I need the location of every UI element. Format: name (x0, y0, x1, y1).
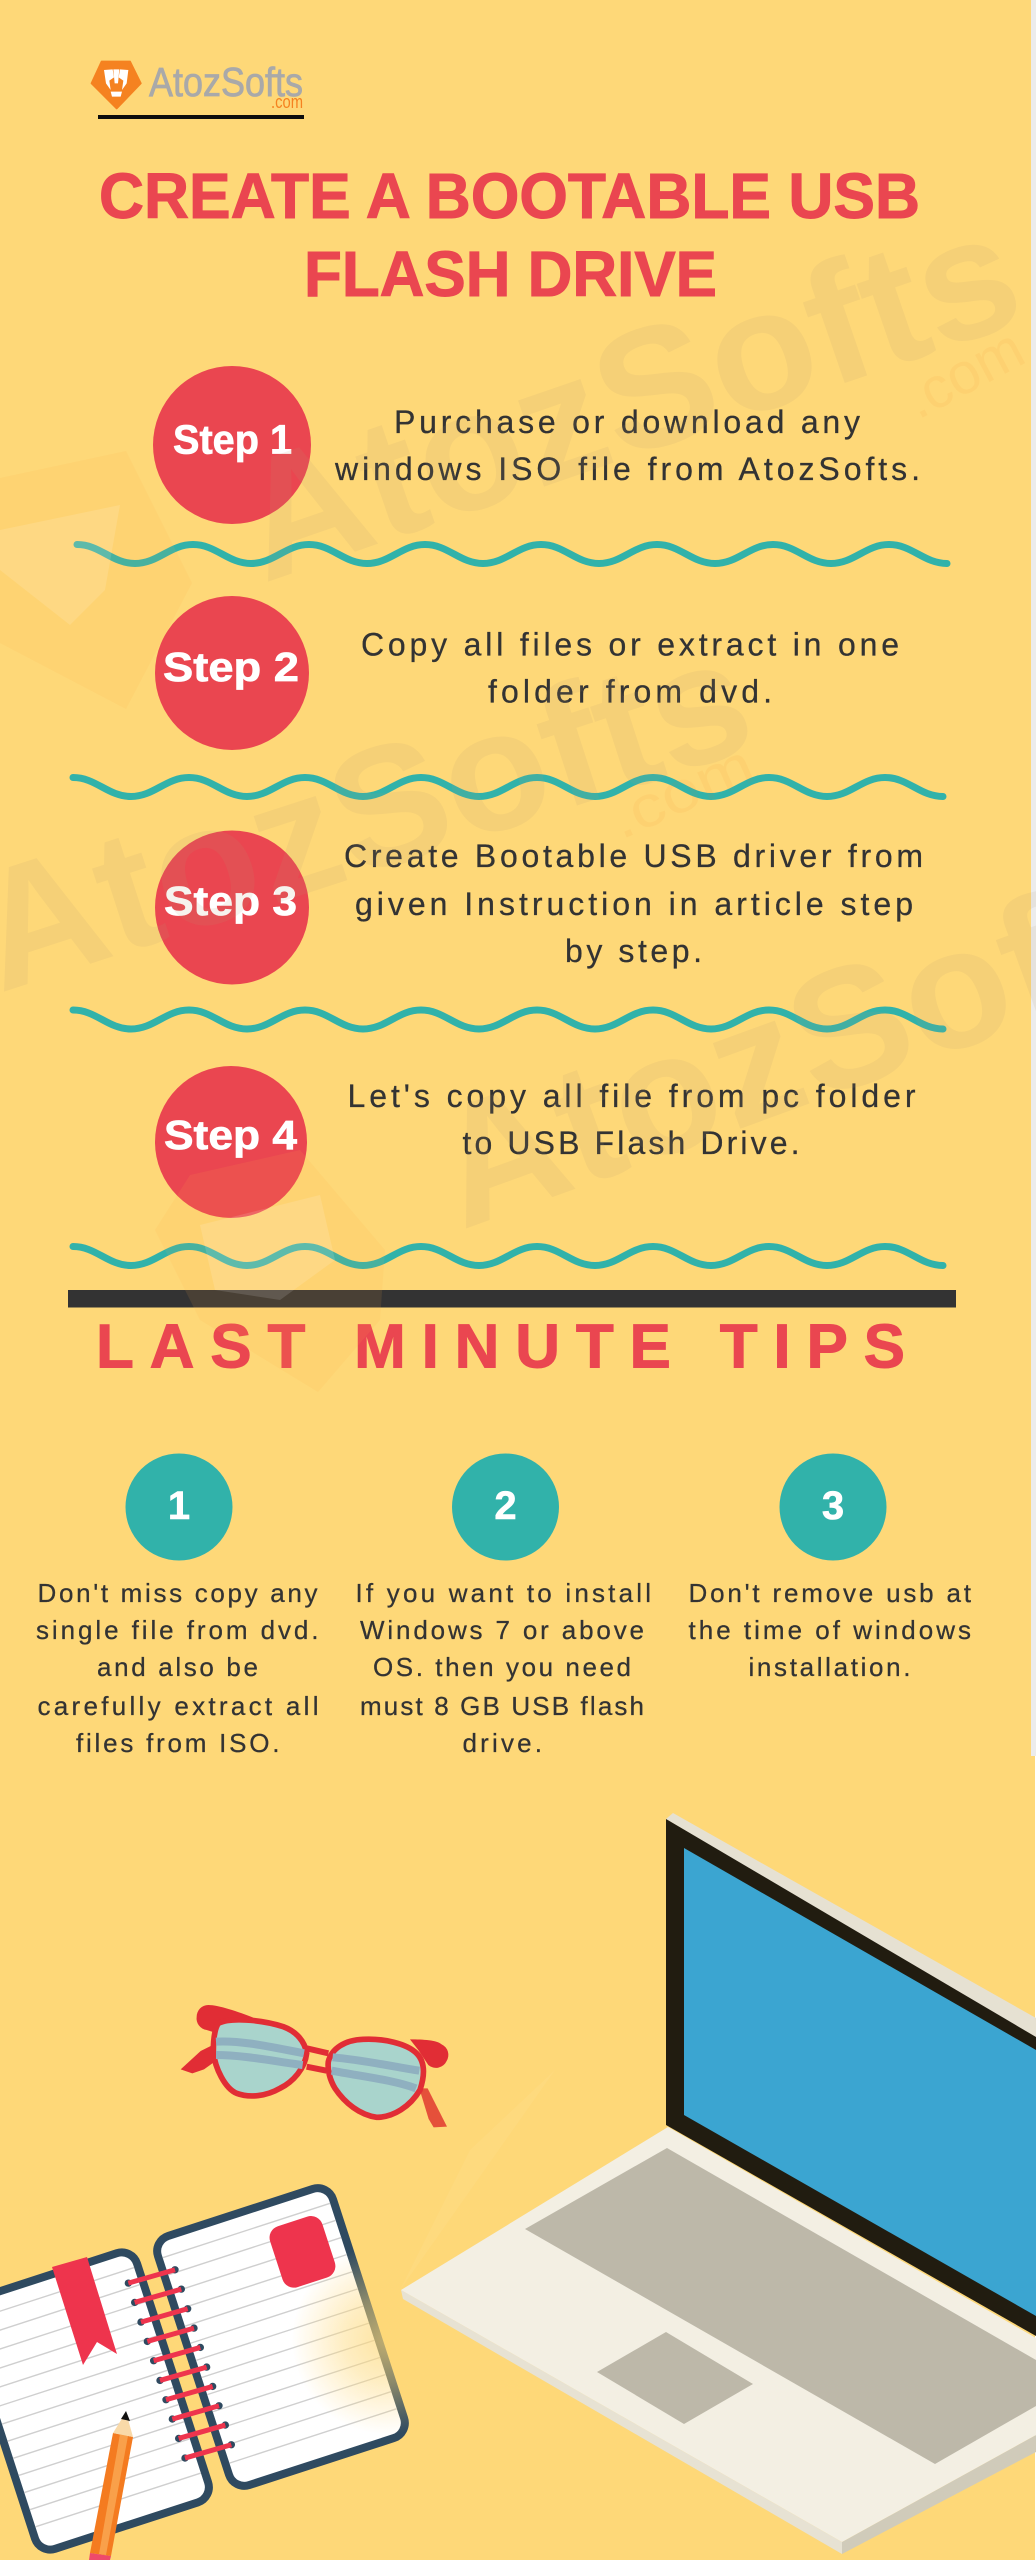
step 2 text (361, 626, 899, 710)
laptop base (401, 2127, 1036, 2554)
tip 1 text (36, 1578, 318, 1758)
watermark: faint AtozSofts logos: .com (894, 315, 1034, 431)
icon: lion shield (92, 62, 141, 108)
tip 1 text: single file from dvd. (36, 1615, 318, 1645)
tip 3 number: 3 (822, 1484, 844, 1528)
logo wordmark: AtozSofts (149, 59, 303, 105)
tip 3 (688, 1454, 972, 1682)
tip 3 text: Don't remove usb at (688, 1578, 972, 1608)
step 3 (155, 830, 923, 984)
tip 1 text: and also be (97, 1652, 258, 1682)
heading: last minute tips: LAST MINUTE TIPS (96, 1312, 905, 1382)
tip 2 text (356, 1578, 651, 1758)
tip 2 text: If you want to install (356, 1578, 651, 1608)
tip 2 (356, 1454, 651, 1758)
notebook left page (0, 2248, 213, 2554)
logo domain: .com (271, 92, 303, 112)
step 3 badge (155, 830, 309, 984)
bookmark (52, 2257, 117, 2365)
illustration: laptop (400, 1813, 1036, 2554)
step 3 text: by step. (565, 933, 702, 969)
laptop lid (666, 1813, 1036, 2336)
step 2 text: Copy all files or extract in one (361, 626, 899, 662)
step 1 badge (153, 366, 311, 524)
tip 2 text: drive. (462, 1728, 542, 1758)
tip 1 text: carefully extract all (38, 1691, 318, 1721)
tip 3 text: installation. (748, 1652, 910, 1682)
tip 1 text: files from ISO. (76, 1728, 280, 1758)
watermark: faint AtozSofts logos: AtozSofts (214, 175, 1036, 618)
step 1 text: windows ISO file from AtozSofts. (334, 451, 920, 487)
step 4 text (348, 1078, 916, 1161)
tip 1 number (126, 1454, 232, 1560)
step 2 text: folder from dvd. (488, 674, 772, 710)
watermark: faint AtozSofts logos: .com (600, 731, 763, 852)
pencil (89, 2411, 133, 2560)
step 3 text (344, 838, 923, 969)
tip 3 number (780, 1454, 886, 1560)
tip 2 text: OS. then you need (373, 1652, 631, 1682)
tip 2 text: must 8 GB USB flash (360, 1691, 644, 1721)
tip 3 text: the time of windows (688, 1615, 971, 1645)
step 1 (153, 366, 920, 524)
illustration: glasses (181, 2005, 448, 2127)
step 4 (155, 1066, 916, 1218)
tip 2 number: 2 (494, 1484, 517, 1528)
sticky note (266, 2213, 339, 2291)
tip 2 text: Windows 7 or above (360, 1615, 644, 1645)
step 1 badge: Step 1 (173, 416, 292, 462)
logo (92, 59, 304, 119)
illustration: notebook (0, 2182, 415, 2560)
spiral binding (128, 2270, 231, 2458)
step 1 text: Purchase or download any (394, 404, 860, 440)
step 4 text: Let's copy all file from pc folder (348, 1078, 916, 1114)
step 2 badge (155, 596, 309, 750)
step 3 text: Create Bootable USB driver from (344, 838, 923, 874)
step 2 (155, 596, 899, 750)
tip 3 text (688, 1578, 972, 1682)
step 4 badge: Step 4 (164, 1112, 297, 1158)
step 1 text (334, 404, 920, 487)
tip 2 number (452, 1454, 559, 1560)
tip 1 number: 1 (168, 1484, 190, 1528)
step 3 text: given Instruction in article step (355, 886, 913, 922)
step 4 text: to USB Flash Drive. (462, 1125, 800, 1161)
notebook right page (153, 2182, 415, 2494)
laptop keyboard (525, 2148, 1036, 2464)
step 4 badge (155, 1066, 307, 1218)
tip 1 (36, 1454, 318, 1758)
tip 1 text: Don't miss copy any (38, 1578, 318, 1608)
step 2 badge: Step 2 (163, 644, 299, 690)
laptop trackpad (597, 2332, 753, 2424)
title: FLASH DRIVE (304, 238, 717, 310)
step 3 badge: Step 3 (164, 878, 297, 924)
title: CREATE A BOOTABLE USB (99, 160, 920, 232)
watermark: faint AtozSofts logos (0, 175, 1036, 1392)
title (99, 160, 920, 310)
